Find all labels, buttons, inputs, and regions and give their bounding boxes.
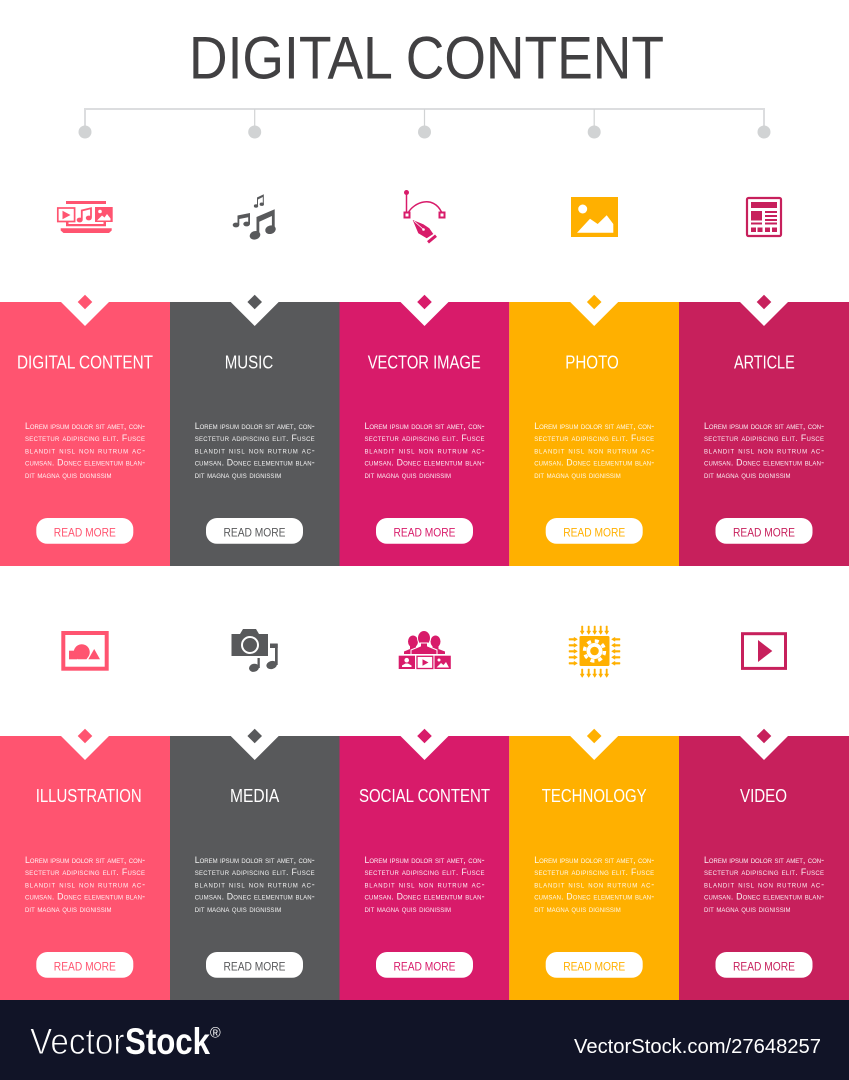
panel: photo [509, 295, 679, 566]
icon: article [747, 198, 781, 236]
body text: cumsan. Donec elementum blan- [534, 892, 654, 902]
button [546, 518, 643, 544]
diamond marker [587, 729, 602, 743]
body text: cumsan. Donec elementum blan- [534, 458, 654, 468]
panel heading: TECHNOLOGY [542, 786, 647, 806]
panel heading: ARTICLE [734, 352, 795, 372]
body text: cumsan. Donec elementum blan- [704, 892, 824, 902]
panel heading: VECTOR IMAGE [368, 352, 481, 372]
body text: sectetur adipiscing elit. Fusce [534, 867, 654, 877]
footer logo: Stock [125, 1021, 210, 1062]
icon: video [742, 634, 786, 668]
icon: vector image [404, 190, 444, 242]
body text: Lorem ipsum dolor sit amet, con- [195, 855, 315, 865]
body text: blandit nisl non rutrum ac- [364, 880, 485, 890]
title: DIGITAL CONTENT [189, 24, 664, 91]
footer image id: VectorStock.com/27648257 [574, 1036, 821, 1058]
body text: dit magna quis dignissim [25, 470, 112, 480]
panel: digital content [0, 295, 170, 566]
body text: cumsan. Donec elementum blan- [25, 458, 145, 468]
panel: article [679, 295, 849, 566]
body text: dit magna quis dignissim [25, 904, 112, 914]
footer logo: Vector [30, 1021, 124, 1062]
button: READ MORE [394, 525, 456, 539]
body text: sectetur adipiscing elit. Fusce [534, 433, 654, 443]
body text: sectetur adipiscing elit. Fusce [364, 867, 484, 877]
body text: sectetur adipiscing elit. Fusce [704, 867, 824, 877]
body text: dit magna quis dignissim [195, 470, 281, 480]
body text: Lorem ipsum dolor sit amet, con- [25, 855, 145, 865]
panel: illustration [0, 729, 170, 1000]
panel heading: MUSIC [225, 352, 273, 372]
diamond marker [247, 729, 262, 743]
diamond marker [587, 295, 602, 309]
body text [534, 855, 654, 914]
body text: Lorem ipsum dolor sit amet, con- [704, 855, 824, 865]
body text: dit magna quis dignissim [364, 470, 451, 480]
body text: sectetur adipiscing elit. Fusce [704, 433, 824, 443]
body text [534, 421, 654, 480]
body text: cumsan. Donec elementum blan- [195, 892, 315, 902]
panel heading: DIGITAL CONTENT [17, 352, 153, 372]
body text: blandit nisl non rutrum ac- [25, 880, 145, 890]
body text: cumsan. Donec elementum blan- [25, 892, 145, 902]
diamond marker [757, 295, 771, 309]
diamond marker [417, 295, 432, 309]
body text: cumsan. Donec elementum blan- [704, 458, 824, 468]
body text: dit magna quis dignissim [195, 904, 281, 914]
button: READ MORE [394, 959, 456, 973]
body text: dit magna quis dignissim [704, 470, 790, 480]
button [716, 518, 812, 544]
body text: cumsan. Donec elementum blan- [364, 892, 485, 902]
panel: music [170, 295, 340, 566]
body text [704, 855, 824, 914]
button: READ MORE [733, 525, 795, 539]
footer logo [30, 1021, 221, 1062]
button: READ MORE [54, 959, 116, 973]
body text: dit magna quis dignissim [534, 470, 621, 480]
footer bar [0, 1000, 849, 1080]
button [206, 952, 303, 978]
body text: Lorem ipsum dolor sit amet, con- [364, 421, 485, 431]
button: READ MORE [733, 959, 795, 973]
body text: sectetur adipiscing elit. Fusce [195, 433, 315, 443]
body text: blandit nisl non rutrum ac- [534, 446, 654, 456]
body text: dit magna quis dignissim [534, 904, 621, 914]
icon: music [233, 194, 277, 241]
body text: sectetur adipiscing elit. Fusce [195, 867, 315, 877]
button [376, 518, 473, 544]
body text: blandit nisl non rutrum ac- [25, 446, 145, 456]
button: READ MORE [563, 959, 625, 973]
body text [25, 855, 145, 914]
diamond marker [247, 295, 262, 309]
body text: sectetur adipiscing elit. Fusce [364, 433, 484, 443]
button [36, 518, 133, 544]
panel heading: SOCIAL CONTENT [359, 786, 490, 806]
body text: sectetur adipiscing elit. Fusce [25, 867, 145, 877]
diamond marker [78, 729, 92, 743]
body text: blandit nisl non rutrum ac- [364, 446, 485, 456]
body text: dit magna quis dignissim [364, 904, 451, 914]
body text: blandit nisl non rutrum ac- [704, 880, 824, 890]
body text [364, 855, 485, 914]
body text: blandit nisl non rutrum ac- [534, 880, 654, 890]
panel heading: MEDIA [230, 786, 279, 806]
icon: illustration [63, 633, 107, 669]
body text: Lorem ipsum dolor sit amet, con- [25, 421, 145, 431]
diamond marker [417, 729, 432, 743]
icon: social content [399, 630, 451, 669]
body text [364, 421, 485, 480]
panel: social content [340, 729, 509, 1000]
diamond marker [78, 295, 92, 309]
timeline connector [78, 109, 770, 138]
body text: Lorem ipsum dolor sit amet, con- [704, 421, 824, 431]
diamond marker [757, 729, 771, 743]
panel: video [679, 729, 849, 1000]
body text: dit magna quis dignissim [704, 904, 790, 914]
icon: technology [569, 626, 620, 678]
panel heading: ILLUSTRATION [36, 786, 142, 806]
body text [195, 855, 315, 914]
button: READ MORE [224, 959, 286, 973]
button [376, 952, 473, 978]
body text: sectetur adipiscing elit. Fusce [25, 433, 145, 443]
footer logo: ® [210, 1026, 221, 1042]
button [206, 518, 303, 544]
body text: Lorem ipsum dolor sit amet, con- [534, 855, 654, 865]
body text [25, 421, 145, 480]
body text: blandit nisl non rutrum ac- [195, 880, 315, 890]
icon: photo [571, 197, 618, 237]
panel: technology [509, 729, 679, 1000]
body text [195, 421, 315, 480]
icon: media [232, 629, 278, 673]
body text: Lorem ipsum dolor sit amet, con- [195, 421, 315, 431]
body text [704, 421, 824, 480]
button [546, 952, 643, 978]
button [36, 952, 133, 978]
panel: vector image [340, 295, 509, 566]
panel heading: PHOTO [565, 352, 619, 372]
button: READ MORE [563, 525, 625, 539]
body text: cumsan. Donec elementum blan- [195, 458, 315, 468]
button: READ MORE [54, 525, 116, 539]
button [716, 952, 812, 978]
body text: cumsan. Donec elementum blan- [364, 458, 485, 468]
body text: blandit nisl non rutrum ac- [195, 446, 315, 456]
panel: media [170, 729, 340, 1000]
body text: Lorem ipsum dolor sit amet, con- [534, 421, 654, 431]
body text: blandit nisl non rutrum ac- [704, 446, 824, 456]
button: READ MORE [224, 525, 286, 539]
panel heading: VIDEO [740, 786, 787, 806]
body text: Lorem ipsum dolor sit amet, con- [364, 855, 485, 865]
icon: digital content [58, 201, 113, 233]
